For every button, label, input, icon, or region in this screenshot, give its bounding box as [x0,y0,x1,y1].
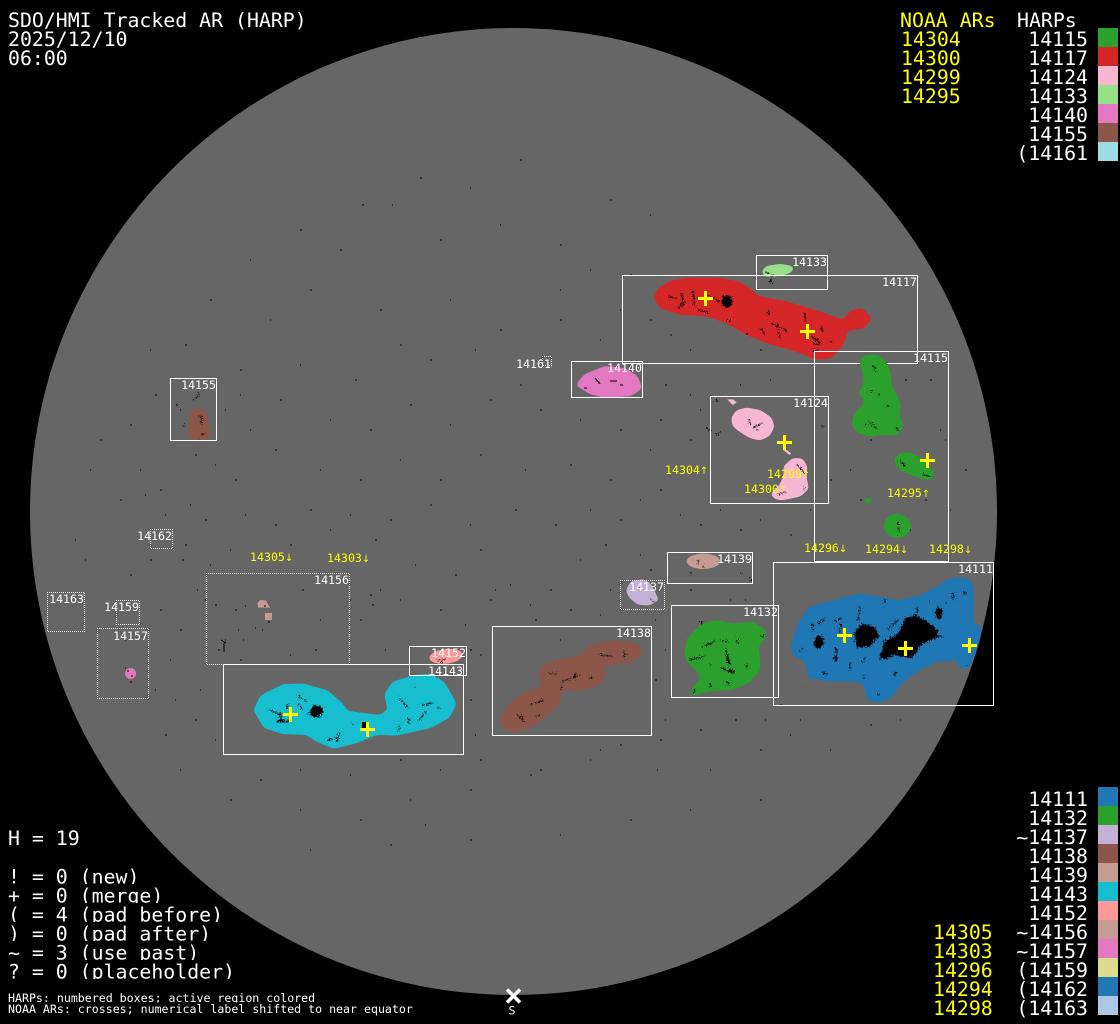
bottom legend: 14111 [1028,788,1088,811]
NOAA AR labels near equator: 14304↑ [665,463,708,477]
blob [763,265,793,283]
blob [853,356,933,538]
label: 14111 [958,562,993,576]
NOAA AR labels near equator: 14299↑ [767,467,810,481]
box [170,378,216,440]
bottom legend: 14138 [1028,845,1088,868]
active region 14143 [224,664,464,754]
NOAA AR labels near equator: 14298↓ [929,542,972,556]
status counts [0,866,240,986]
label: 14162 [137,529,172,543]
active region 14139 [668,552,752,584]
box [756,256,828,290]
top legend: 14133 [1028,85,1088,108]
label: 14124 [793,396,828,410]
label: 14159 [104,600,139,614]
label: 14137 [629,580,664,594]
box [150,530,172,548]
bottom legend: 14296 [933,959,993,982]
spots [218,605,270,652]
box [224,664,464,754]
bottom legend: ~14137 [1016,826,1088,849]
south pole marker [507,990,520,1018]
box [492,626,652,736]
title block: SDO/HMI Tracked AR (HARP) [8,9,307,32]
status counts: ! = 0 (new) [8,866,139,888]
top legend: 14124 [1028,66,1088,89]
box [672,606,778,698]
active region 14159 [104,600,140,624]
top legend: NOAA ARs [900,9,996,32]
scattered magnetogram specks [75,160,967,850]
blob [501,641,642,731]
blob [175,393,210,441]
box [410,646,466,676]
active region 14117 [622,275,918,364]
label: 14157 [113,629,148,643]
title block: 06:00 [8,47,68,70]
label: 14115 [913,351,948,365]
bottom legend: 14305 [933,921,993,944]
blob [705,399,823,499]
active region 14140 [572,361,642,398]
spots [125,668,133,683]
active region 14161 [516,356,552,371]
box [98,628,148,698]
blob [257,600,272,620]
label: 14138 [616,626,651,640]
top legend: 14299 [901,66,961,89]
bottom legend: 14139 [1028,864,1088,887]
bottom legend: ~14156 [1016,921,1088,944]
top legend: 14295 [901,85,961,108]
label: 14143 [428,664,463,678]
label: 14152 [431,646,466,660]
active region 14137 [620,580,664,610]
bottom legend: (14159 [1016,959,1088,982]
status counts: + = 0 (merge) [8,884,163,908]
box [668,552,752,584]
H count: H = 19 [8,827,80,850]
title block [8,9,307,70]
status counts: ~ = 3 (use past) [8,942,199,964]
bottom legend: 14143 [1028,883,1088,906]
label: 14163 [49,592,84,606]
footnote: NOAA ARs: crosses; numerical label shifted to near equator [8,1002,413,1016]
NOAA AR labels near equator: 14295↑ [887,486,930,500]
active region 14133 [756,255,828,290]
top legend: 14115 [1028,28,1088,51]
active region 14156 [206,573,350,664]
box [572,362,642,398]
NOAA AR crosses [283,291,977,737]
top legend [900,9,1118,165]
top legend: 14117 [1028,47,1088,70]
blob [429,647,463,665]
blob [577,367,641,397]
active region 14124 [705,396,828,504]
blob [791,579,981,702]
active region 14155 [170,378,216,441]
top legend: 14155 [1028,123,1088,146]
box [622,276,918,364]
box [206,574,350,664]
bottom legend [933,787,1118,1020]
top legend: 14304 [901,28,961,51]
NOAA AR labels near equator: 14305↓ [250,550,293,564]
footnote: HARPs: numbered boxes; active region colored [8,991,315,1005]
active region 14111 [774,562,994,706]
label: 14161 [516,357,551,371]
box [774,562,994,706]
label: 14140 [607,361,642,375]
active region 14132 [672,605,778,698]
NOAA AR labels near equator [250,463,972,565]
active region 14152 [410,646,466,676]
status counts: ? = 0 (placeholder) [8,960,235,984]
box [116,600,140,624]
NOAA AR labels near equator: 14294↓ [865,542,908,556]
active region 14138 [492,626,652,736]
spots [584,378,623,388]
top legend: (14161 [1016,142,1088,165]
NOAA AR labels near equator: 14296↓ [804,541,847,555]
top legend: 14140 [1028,104,1088,127]
label: 14139 [717,552,752,566]
label: 14117 [882,275,917,289]
box [48,592,84,632]
blob [655,279,871,359]
bottom legend: 14132 [1028,807,1088,830]
blob [685,620,765,694]
label: 14133 [792,255,827,269]
title block: 2025/12/10 [8,28,127,51]
label: S: S [509,1004,516,1018]
blob [687,554,750,582]
top legend: 14300 [901,47,961,70]
bottom legend: 14152 [1028,902,1088,925]
active region 14163 [48,592,84,632]
blob [255,675,455,748]
footnote [0,991,413,1016]
top legend: HARPs [1017,9,1077,32]
bottom legend: (14162 [1016,978,1088,1001]
bottom legend: ~14157 [1016,940,1088,963]
box [710,396,828,504]
bottom legend: 14294 [933,978,993,1001]
box [814,352,948,562]
bottom legend: (14163 [1016,997,1088,1020]
status counts: ) = 0 (pad after) [8,922,211,946]
NOAA AR labels near equator: 14303↓ [327,551,370,565]
bottom legend: 14298 [933,997,993,1020]
box [620,580,664,610]
active region 14162 [137,529,172,548]
icon: cross [507,990,520,1002]
label: 14132 [743,605,778,619]
active region 14157 [98,628,148,698]
label: 14155 [181,378,216,392]
status counts: ( = 4 (pad before) [8,904,223,926]
blob [125,668,136,679]
blob [627,580,658,604]
box [542,356,552,366]
active region 14115 [814,351,948,562]
bottom legend: 14303 [933,940,993,963]
label: 14156 [314,573,349,587]
NOAA AR labels near equator: 14300↑ [744,482,787,496]
